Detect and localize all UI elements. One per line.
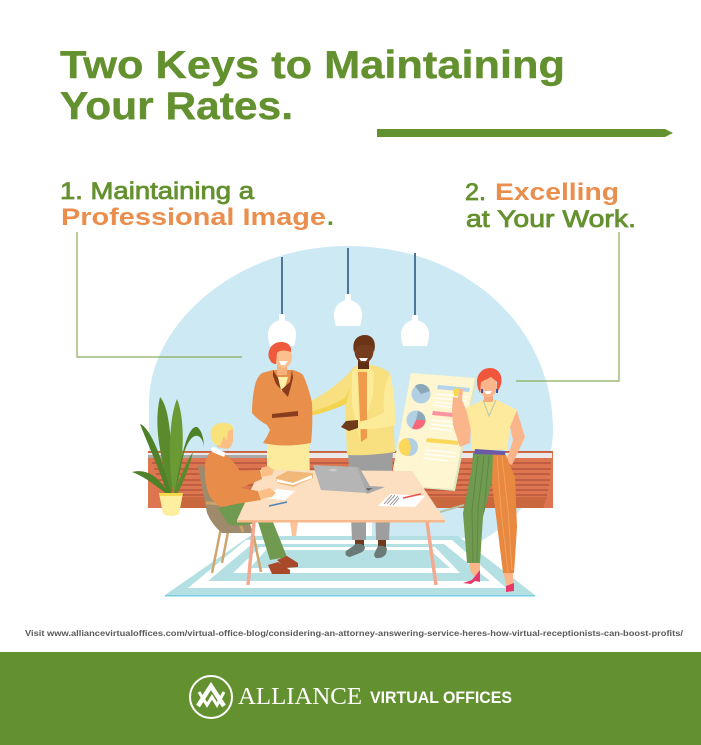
belt xyxy=(474,449,505,455)
title xyxy=(60,44,565,128)
source link: Visit www.alliancevirtualoffices.com/virtual-office-blog/considering-an-attorney-answering-service-heres-how-virtual-receptionists-can-boost-profits/ xyxy=(25,628,684,638)
connector: key 1 to illustration xyxy=(77,232,242,357)
heading: key 1: 1. Maintaining a xyxy=(60,178,254,205)
document and red pen xyxy=(378,494,425,507)
heading: key 2: Excelling xyxy=(495,179,619,206)
desk xyxy=(237,470,445,585)
man head xyxy=(353,335,375,369)
background blob xyxy=(149,246,553,540)
seated man torso xyxy=(205,423,276,507)
logo wordmark xyxy=(238,684,512,710)
green trouser leg xyxy=(463,453,493,563)
book xyxy=(276,471,313,487)
chair xyxy=(198,465,261,573)
presentation board xyxy=(393,373,477,491)
heading: key 1: . xyxy=(327,204,334,231)
connector: key 2 to illustration xyxy=(516,232,619,381)
head xyxy=(268,342,292,375)
arms xyxy=(452,389,471,447)
man hand xyxy=(341,420,358,431)
hanging lamps xyxy=(268,248,429,346)
orange trouser leg xyxy=(492,453,517,573)
bench xyxy=(148,451,553,508)
plant xyxy=(132,397,204,516)
heading: key 1 xyxy=(60,178,334,231)
laptop xyxy=(313,465,385,494)
logo emblem xyxy=(190,676,232,718)
arrow rule under title xyxy=(377,129,673,137)
man shoes xyxy=(346,540,387,558)
seated man legs xyxy=(218,502,298,574)
heading: key 2: at Your Work. xyxy=(466,206,636,233)
skirt and legs xyxy=(290,522,298,536)
title: Your Rates. xyxy=(60,85,293,128)
standing man xyxy=(307,335,396,558)
blouse xyxy=(466,400,517,450)
heading: key 2 xyxy=(465,179,636,233)
chair strap xyxy=(440,505,464,512)
pie charts xyxy=(398,384,430,456)
logo wordmark: ALLIANCE xyxy=(238,684,362,710)
woman in striped trousers xyxy=(440,368,525,592)
jacket xyxy=(252,370,312,446)
head xyxy=(477,368,502,402)
rug xyxy=(165,536,535,596)
heading: key 2: 2. xyxy=(465,179,486,206)
heading: key 1: Professional Image xyxy=(61,204,326,231)
man jacket xyxy=(307,365,395,455)
title: Two Keys to Maintaining xyxy=(60,44,565,87)
legs and heels xyxy=(463,562,514,592)
notepad and pen xyxy=(262,489,295,506)
logo wordmark: VIRTUAL OFFICES xyxy=(370,689,512,707)
footer band xyxy=(0,652,701,745)
illustration: office team xyxy=(132,246,553,596)
board bars xyxy=(423,385,470,461)
man trousers xyxy=(348,450,393,540)
woman in orange jacket xyxy=(252,342,312,536)
